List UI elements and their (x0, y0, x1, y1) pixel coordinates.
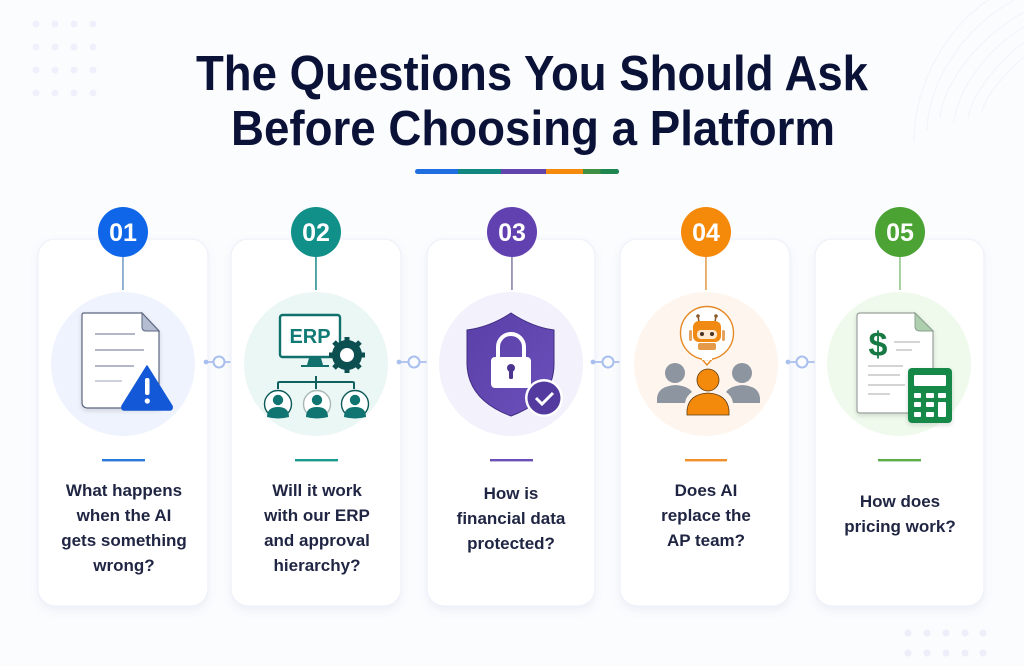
icon circle (634, 292, 778, 436)
panel 2: ERP (231, 207, 401, 606)
question text: financial data (457, 509, 566, 528)
title underline (415, 169, 619, 174)
decorative arcs top right (914, 0, 1024, 142)
question text: with our ERP (263, 506, 370, 525)
badge 02 (291, 207, 341, 257)
connector (511, 257, 513, 290)
connector 1-2 (204, 356, 234, 368)
icon circle (51, 292, 195, 436)
connector (899, 257, 901, 290)
question text: and approval (264, 531, 370, 550)
icon circle (827, 292, 971, 436)
badge 02: 02 (302, 219, 330, 247)
question text: How is (484, 484, 538, 503)
icon: ERP monitor and org chart (264, 315, 368, 418)
badge 05: 05 (886, 219, 914, 247)
question text (263, 481, 370, 575)
badge 01 (98, 207, 148, 257)
accent line (102, 459, 145, 461)
connector 2-3 (398, 356, 430, 368)
question text: How does (860, 492, 940, 511)
panel 5: pricing (815, 207, 984, 606)
icon: invoice with calculator: $ (869, 326, 888, 364)
badge 04: 04 (692, 219, 720, 247)
icon: ERP monitor and org chart: ERP (289, 326, 331, 348)
title (196, 46, 868, 156)
question text: pricing work? (844, 517, 956, 536)
question text: Does AI (675, 481, 737, 500)
panel 3: security (427, 207, 595, 606)
connector (315, 257, 317, 290)
accent line (878, 459, 921, 461)
icon: invoice with calculator (857, 313, 952, 423)
icon circle (244, 292, 388, 436)
decorative dot grid top left (32, 20, 96, 96)
question text: AP team? (667, 531, 745, 550)
question text (661, 481, 751, 550)
panel 1: AI errors (38, 207, 208, 606)
accent line (295, 459, 338, 461)
connector 3-4 (592, 356, 624, 368)
accent line (685, 459, 727, 461)
badge 03: 03 (498, 219, 526, 247)
question text: replace the (661, 506, 751, 525)
title: Before Choosing a Platform (231, 101, 835, 156)
badge 03 (487, 207, 537, 257)
question text (844, 492, 956, 536)
title: The Questions You Should Ask (196, 46, 868, 101)
icon circle (439, 292, 583, 436)
connector (705, 257, 707, 290)
question text: when the AI (76, 506, 171, 525)
question text: hierarchy? (274, 556, 360, 575)
connector 4-5 (786, 356, 818, 368)
icon: document with warning (82, 313, 172, 410)
question text: Will it work (272, 481, 362, 500)
accent line (490, 459, 533, 461)
icon: shield with lock (467, 313, 563, 417)
icon: robot above team (657, 306, 760, 415)
panel 4: AI and team (620, 207, 790, 606)
question text (457, 484, 566, 553)
badge 05 (875, 207, 925, 257)
question text: What happens (66, 481, 182, 500)
badge 04 (681, 207, 731, 257)
question text: wrong? (92, 556, 155, 575)
question text: gets something (61, 531, 187, 550)
question text (61, 481, 187, 575)
connector (122, 257, 124, 290)
badge 01: 01 (109, 219, 137, 247)
question text: protected? (467, 534, 555, 553)
decorative dot grid bottom right (904, 630, 986, 656)
